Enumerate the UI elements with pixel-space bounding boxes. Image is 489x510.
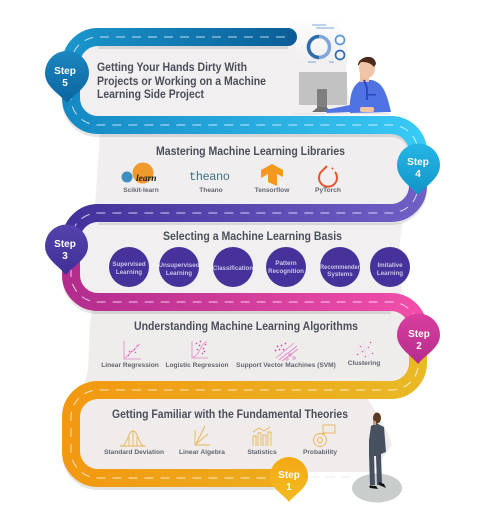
circles: learning types: Systems xyxy=(327,271,353,278)
library: tensorflow: Tensorflow xyxy=(255,187,290,194)
pin: step 5: Step xyxy=(54,66,76,77)
library: scikit-learn: learn xyxy=(136,174,157,184)
pin: step 1: Step xyxy=(278,470,300,481)
circles: learning types: Recognition xyxy=(268,268,304,275)
icon: person at computer xyxy=(293,57,391,114)
library: theano: theano xyxy=(189,170,230,184)
algorithm: clustering xyxy=(348,342,380,367)
algorithm: linear regression: Linear Regression xyxy=(101,362,159,369)
theory: probability xyxy=(303,425,337,456)
pin: step 2: 2 xyxy=(416,341,422,352)
heading: step 5 xyxy=(97,60,266,101)
pin: step 3: 3 xyxy=(62,251,68,262)
theory: linear algebra: Linear Algebra xyxy=(179,449,225,456)
heading: step 5: Getting Your Hands Dirty With xyxy=(97,60,247,74)
circles: learning types: Classification xyxy=(213,265,253,272)
panel backgrounds xyxy=(80,16,410,472)
pin: step 4 xyxy=(397,144,440,195)
library: scikit-learn xyxy=(122,162,159,194)
heading: step 2: Understanding Machine Learning Algorithms xyxy=(134,319,358,333)
library: pytorch xyxy=(315,166,341,194)
theory: probability: Probability xyxy=(303,449,337,456)
pin: step 1: 1 xyxy=(286,482,292,493)
pin: step 1 xyxy=(270,457,308,502)
circles: learning types xyxy=(109,247,410,287)
icon: donut charts xyxy=(308,25,344,62)
algorithm: clustering: Clustering xyxy=(348,360,380,367)
pin: step 5: 5 xyxy=(62,78,68,89)
library: theano: Theano xyxy=(199,187,223,194)
theory: standard deviation: Standard Deviation xyxy=(104,449,164,456)
algorithm: logistic regression xyxy=(165,341,229,369)
road: pink step 2 xyxy=(71,258,418,352)
pin: step 4: 4 xyxy=(415,169,421,180)
road: purple step 3 xyxy=(71,170,418,262)
circles: learning types: Supervised xyxy=(112,261,146,268)
circles: learning types: Pattern xyxy=(275,260,297,267)
pin: step 3: Step xyxy=(54,239,76,250)
heading: step 3: Selecting a Machine Learning Basis xyxy=(163,229,342,243)
circles: learning types: Learning xyxy=(166,270,192,277)
library: pytorch: PyTorch xyxy=(315,187,341,194)
circles: learning types: Unsupervised xyxy=(159,262,200,269)
pin: step 4: Step xyxy=(407,157,429,168)
algorithm: logistic regression: Logistic Regression xyxy=(165,362,229,369)
heading: step 1: Getting Familiar with the Fundamental Theories xyxy=(112,407,348,421)
road: gold step 1 xyxy=(71,350,418,481)
theory: standard deviation xyxy=(104,431,164,456)
pin: step 2: Step xyxy=(408,329,430,340)
circles: learning types: Learning xyxy=(116,269,142,276)
theory: statistics xyxy=(247,427,277,456)
algorithm: support vector machines xyxy=(236,343,336,369)
pin: step 2 xyxy=(397,314,440,364)
theory: linear algebra xyxy=(179,426,225,456)
circles: learning types: Imitative xyxy=(377,262,403,269)
library: theano xyxy=(189,170,230,194)
algorithm: linear regression xyxy=(101,341,159,369)
road: blue step 5 xyxy=(71,37,418,172)
heading: step 4: Mastering Machine Learning Libraries xyxy=(156,144,345,158)
library: tensorflow xyxy=(255,164,290,194)
pin: step 3 xyxy=(45,224,88,275)
algorithm: support vector machines: Support Vector Machines (SVM) xyxy=(236,362,336,369)
heading: step 5: Learning Side Project xyxy=(97,87,204,101)
theory: statistics: Statistics xyxy=(247,449,277,456)
circles: learning types: Recommender xyxy=(320,264,361,271)
circles: learning types: Learning xyxy=(377,270,403,277)
heading: step 5: Projects or Working on a Machine xyxy=(97,74,266,88)
library: scikit-learn: Scikit-learn xyxy=(123,187,159,194)
icon: businessman on platform xyxy=(352,412,402,502)
pin: step 5 xyxy=(45,51,89,103)
